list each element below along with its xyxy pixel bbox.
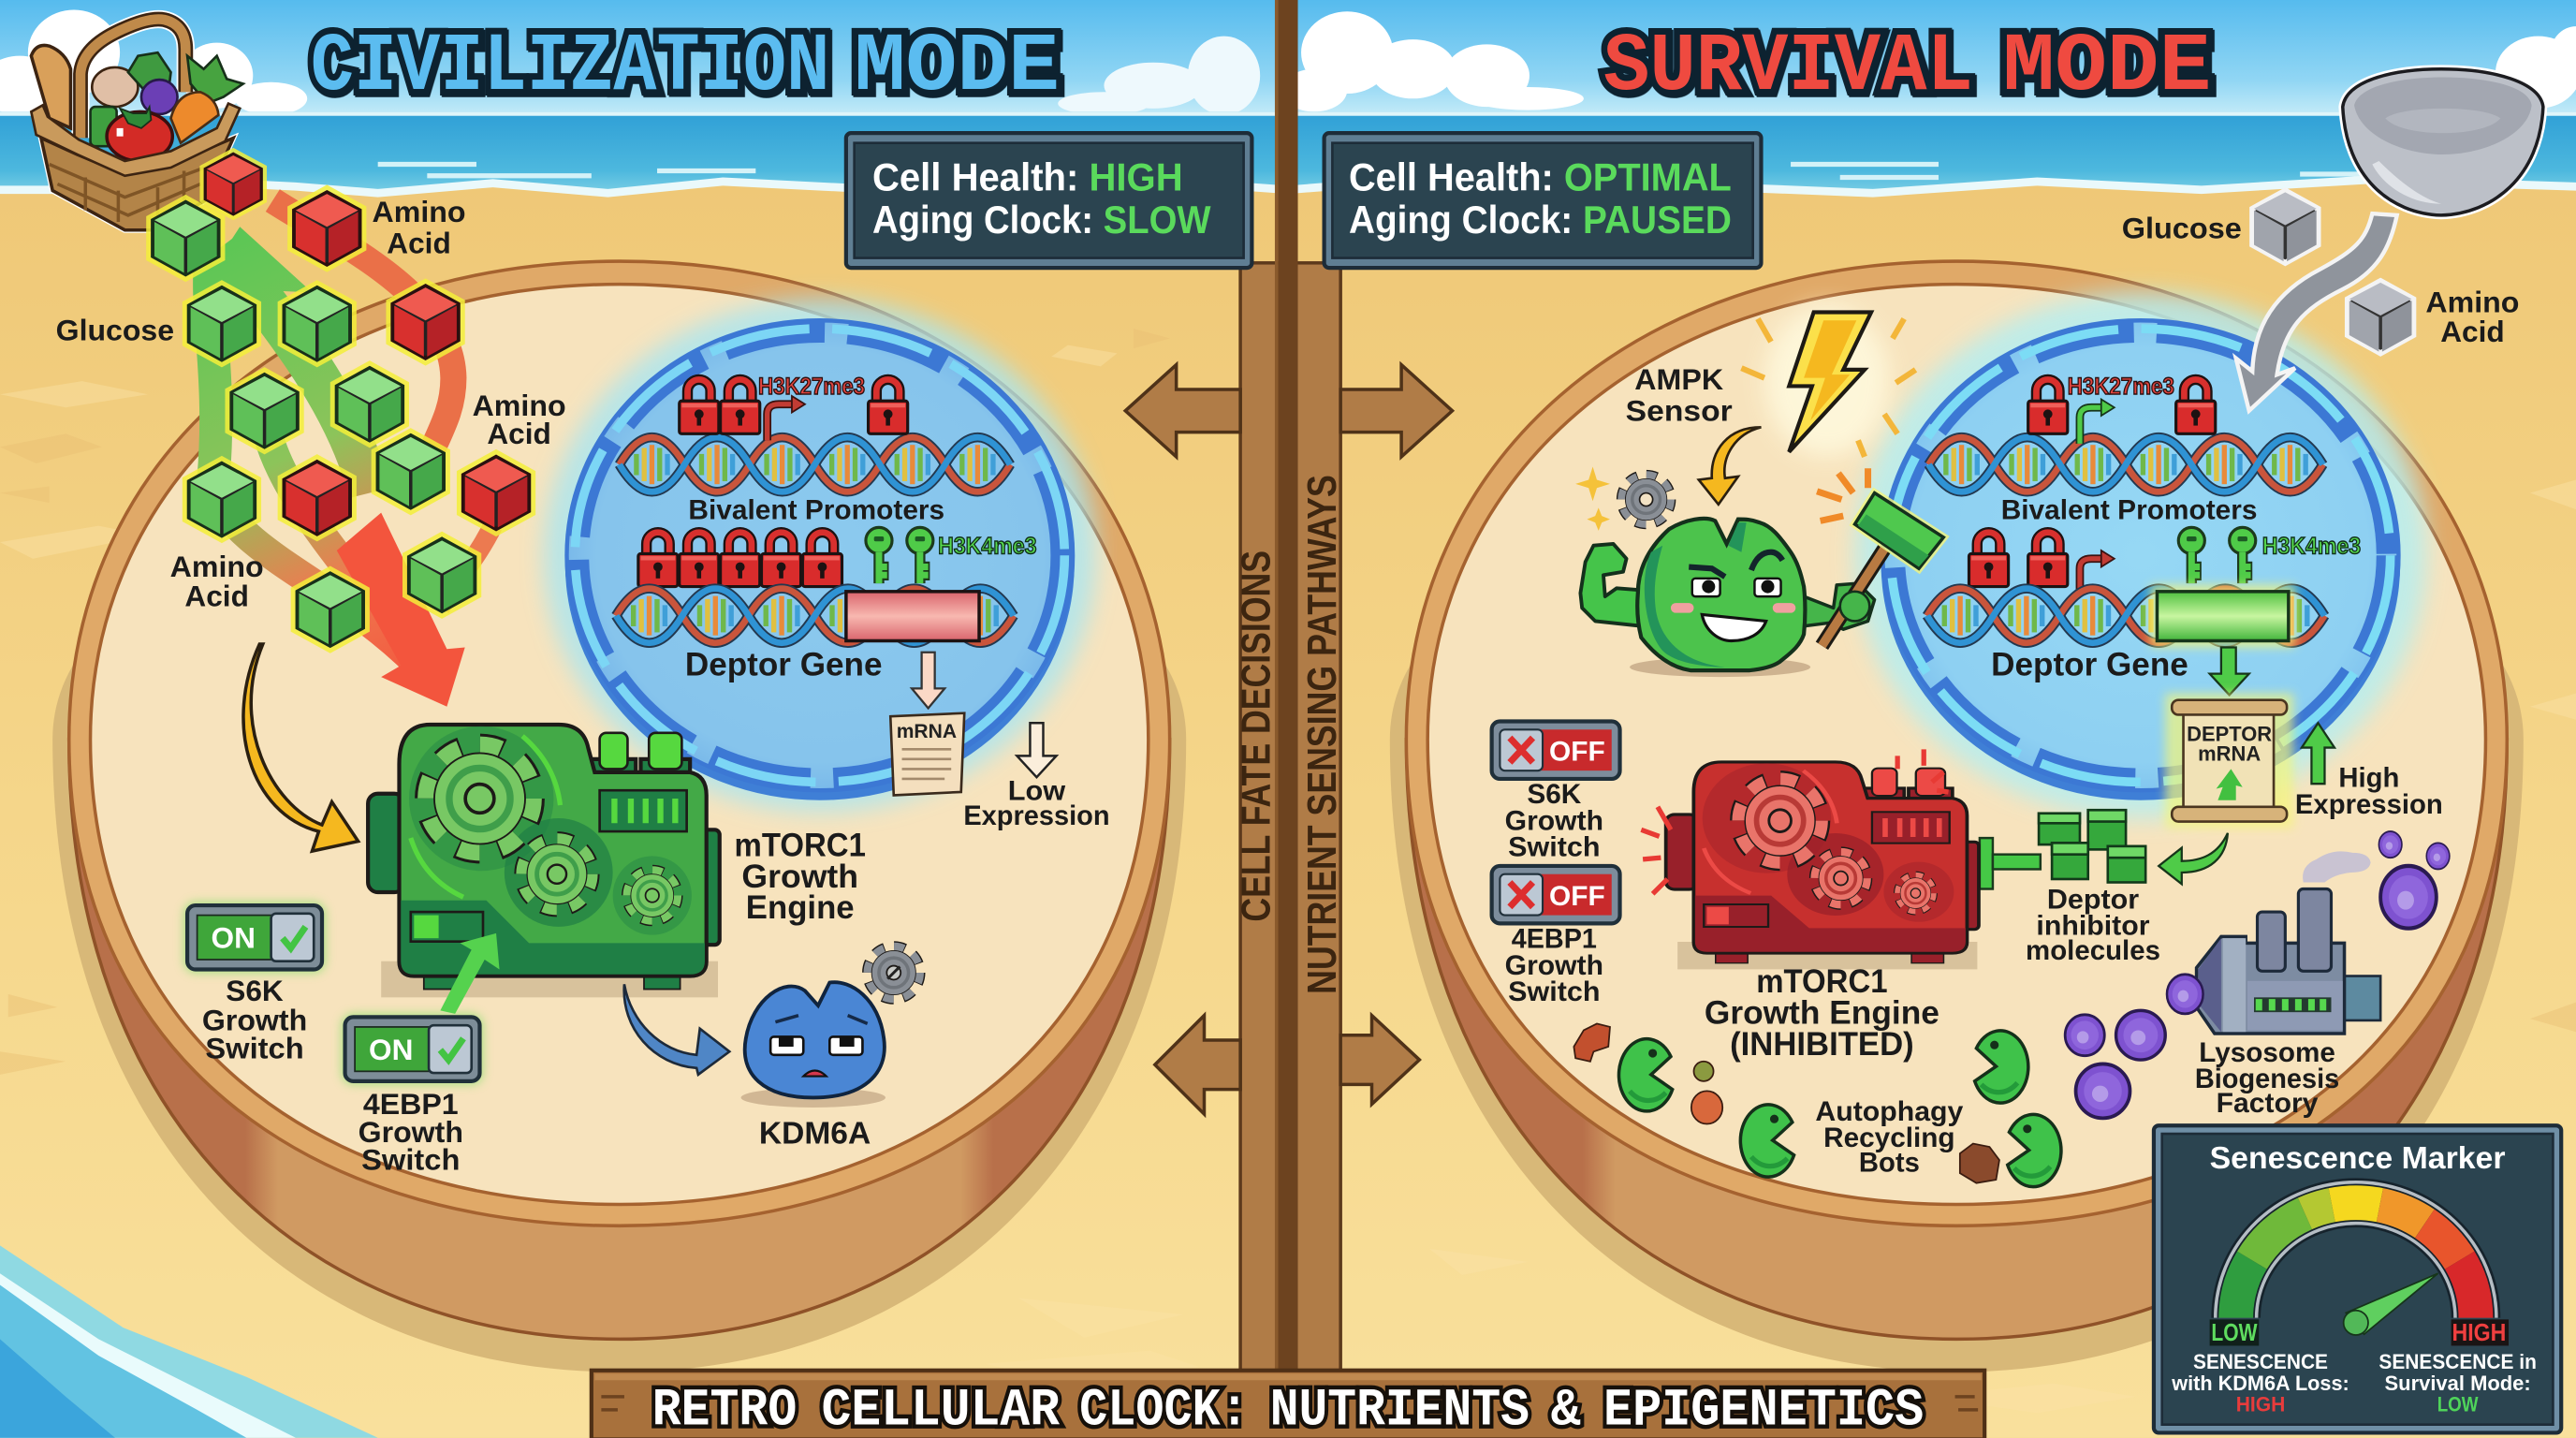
debris particles [1573, 1023, 1999, 1183]
label: 4EBP1 growth switch: 4EBP1 [1512, 924, 1597, 955]
label: autophagy bots [1815, 1096, 1964, 1178]
label: mTORC1 growth engine: Engine [746, 889, 855, 926]
arrow: transcription [2210, 648, 2249, 695]
label: S6K growth switch: Switch [1508, 831, 1600, 862]
label: amino acid depleted [2425, 285, 2519, 348]
label: S6K growth switch: Growth [1505, 805, 1603, 836]
status box: civilization [846, 133, 1251, 268]
label: S6K growth switch [202, 974, 307, 1064]
label: amino acid left: Acid [184, 580, 249, 613]
arrow: upper right branch [1340, 365, 1453, 457]
label: deptor inhibitor molecules: molecules [2026, 935, 2160, 966]
banner: retro cellular clock [592, 1371, 1984, 1438]
status box: civilization: Cell Health: HIGH [872, 155, 1183, 199]
label: 4EBP1 growth switch [359, 1087, 463, 1177]
panel: survival mode cell [1390, 261, 2524, 1372]
switch: 4EBP1 off: OFF [1549, 881, 1605, 912]
tag: H3K4me3: H3K4me3 [2262, 534, 2361, 559]
label: mTORC1 inhibited: mTORC1 [1756, 963, 1888, 1000]
text: senescence with KDM6A loss: SENESCENCE [2193, 1350, 2328, 1373]
label: glucose: Glucose [56, 313, 174, 346]
text: senescence in survival mode: LOW [2437, 1393, 2479, 1416]
character: tired KDM6A [741, 982, 886, 1108]
label: bivalent promoters: Bivalent Promoters [688, 495, 944, 526]
title: civilization mode: MODE [855, 22, 1060, 114]
text: senescence with KDM6A loss: with KDM6A Loss: [2171, 1372, 2349, 1395]
label: lysosome factory [2195, 1037, 2339, 1119]
label: amino acid left: Amino [170, 550, 264, 583]
label: deptor inhibitor molecules: inhibitor [2036, 911, 2150, 942]
label: deptor gene: Deptor Gene [685, 646, 882, 682]
panel: civilization mode cell [52, 261, 1186, 1372]
label: mTORC1 growth engine: mTORC1 [735, 827, 866, 863]
lysosome biogenesis factory [2197, 851, 2380, 1034]
label: mTORC1 inhibited [1705, 963, 1939, 1063]
deptor mRNA scroll: mRNA [2198, 742, 2261, 766]
status box: survival [1325, 133, 1761, 268]
nucleus [1855, 292, 2426, 818]
label: mTORC1 growth engine: Growth [741, 858, 858, 895]
label: 4EBP1 growth switch: Switch [361, 1143, 460, 1177]
arrow: lower left branch [1155, 1016, 1240, 1114]
DNA: bivalent promoters [620, 437, 1010, 492]
arrow: upper left branch [1125, 365, 1240, 457]
mRNA scroll: mRNA [897, 721, 957, 742]
label: 4EBP1 growth switch: Switch [1508, 976, 1600, 1007]
label: high expression [2295, 763, 2443, 820]
arrow: switch to engine [440, 933, 500, 1014]
switch: S6K on: ON [212, 921, 256, 955]
deptor gene block [846, 592, 979, 640]
label: amino acid top: Acid [387, 226, 451, 259]
machine: mTORC1 growth engine [368, 725, 720, 997]
label: amino acid depleted: Acid [2440, 315, 2505, 348]
arrow: low expression [1017, 723, 1057, 777]
sea [0, 111, 2576, 211]
arrow: AMPK to KDM6A [1699, 427, 1761, 505]
character: energized KDM6A [1580, 519, 1875, 677]
flow arrows [210, 246, 419, 666]
arrow: scarce nutrient flow [2236, 213, 2397, 411]
label: S6K growth switch: S6K [1527, 779, 1582, 810]
label: AMPK sensor: AMPK [1634, 362, 1723, 396]
label: AMPK sensor [1626, 362, 1733, 427]
arrow: engine to KDM6A [624, 984, 729, 1075]
promoter arrow [768, 396, 805, 440]
label: cell fate decisions: CELL FATE DECISIONS [1234, 550, 1280, 922]
label: deptor inhibitor molecules: Deptor [2047, 885, 2140, 916]
label: lysosome factory: Factory [2217, 1088, 2319, 1119]
autophagy recycling bots [1618, 1031, 2061, 1187]
cube: glucose depleted [2252, 191, 2318, 263]
deptor inhibitor molecules [2039, 810, 2145, 882]
DNA: deptor gene active [1927, 589, 2324, 643]
title: survival mode: SURVIVAL [1603, 22, 1973, 114]
lightning sparks [1741, 318, 1915, 457]
mRNA scroll [890, 713, 964, 795]
label: 4EBP1 growth switch: Growth [1505, 950, 1603, 981]
high indicator: HIGH [2452, 1318, 2506, 1346]
cell body [52, 261, 1186, 1372]
label: mTORC1 inhibited: (INHIBITED) [1730, 1026, 1914, 1063]
label: KDM6A: KDM6A [759, 1117, 871, 1152]
switch: 4EBP1 on: ON [369, 1033, 413, 1066]
gear: active [1622, 476, 1670, 523]
switch: 4EBP1 off [1492, 866, 1620, 923]
machine: mTORC1 inhibited [1666, 762, 1979, 969]
promoter arrow: active [2080, 399, 2115, 444]
label: nutrient sensing pathways: NUTRIENT SENSING PATHWAYS [1299, 475, 1345, 994]
label: amino acid right: Amino [473, 389, 566, 422]
sparkles [1575, 466, 1610, 531]
label: mTORC1 inhibited: Growth Engine [1705, 994, 1939, 1031]
status box: civilization: Aging Clock: SLOW [872, 198, 1211, 242]
central divider post [1125, 0, 1453, 1372]
title: survival mode [1603, 22, 2211, 114]
lysosome vesicles [2065, 831, 2450, 1118]
label: autophagy bots: Bots [1859, 1147, 1920, 1178]
arrow: yellow signal to engine [243, 644, 359, 851]
text: senescence with KDM6A loss: HIGH [2236, 1393, 2285, 1416]
label: low expression: Expression [963, 800, 1110, 831]
warning sparks [1641, 749, 1949, 894]
switch: 4EBP1 on [342, 1014, 483, 1084]
text: senescence in survival mode: SENESCENCE in [2378, 1350, 2537, 1373]
impact sparks [1817, 468, 1868, 521]
inhibition bar [1980, 838, 2041, 889]
nutrient stream: civilization mode [56, 154, 566, 707]
icon: empty bowl [2343, 69, 2543, 215]
tag: H3K4me3: H3K4me3 [938, 534, 1036, 559]
text: senescence in survival mode: Survival Mode: [2385, 1372, 2531, 1395]
arrow: high expression [2302, 723, 2334, 784]
label: bivalent promoters: Bivalent Promoters [2001, 495, 2258, 526]
label: autophagy bots: Autophagy [1815, 1096, 1964, 1127]
icon: food basket [31, 19, 243, 230]
label: amino acid right: Acid [487, 417, 551, 450]
arrow: weak transcription [912, 653, 944, 708]
epigenetic locks: upper [2028, 379, 2216, 433]
promoter arrow: gene [2080, 550, 2115, 592]
nutrient cubes [153, 154, 529, 646]
status box: survival: Aging Clock: PAUSED [1349, 198, 1732, 242]
label: mTORC1 growth engine [735, 827, 866, 926]
label: amino acid top [373, 195, 466, 259]
title: civilization mode: CIVILIZATION [311, 22, 829, 114]
switch: S6K on [184, 902, 326, 973]
cube: amino acid depleted [2348, 281, 2413, 353]
clouds [0, 10, 2576, 115]
label: AMPK sensor: Sensor [1626, 393, 1733, 427]
gear: KDM6A idle [868, 947, 919, 998]
label: lysosome factory: Lysosome [2199, 1037, 2335, 1068]
label: high expression: High [2338, 763, 2399, 794]
cell body [1390, 261, 2524, 1372]
DNA: bivalent promoters [1928, 437, 2323, 492]
label: S6K growth switch [1505, 779, 1603, 862]
DNA: deptor gene silenced [616, 589, 1014, 643]
arrow: mRNA to molecules [2159, 833, 2228, 884]
label: 4EBP1 growth switch: 4EBP1 [363, 1087, 459, 1121]
label: S6K growth switch: S6K [226, 974, 284, 1007]
label: amino acid left [170, 550, 264, 613]
deptor mRNA scroll: DEPTOR [2187, 723, 2272, 746]
label: lysosome factory: Biogenesis [2195, 1064, 2339, 1094]
bottom-left sea [0, 1245, 378, 1438]
epigenetic locks: upper [680, 379, 908, 433]
label: S6K growth switch: Switch [205, 1031, 304, 1064]
label: amino acid depleted: Amino [2425, 285, 2519, 318]
text: senescence with KDM6A loss [2171, 1350, 2349, 1416]
label: deptor gene: Deptor Gene [1991, 646, 2188, 682]
gauge needle [2344, 1273, 2438, 1335]
label: low expression: Low [1008, 776, 1066, 807]
arrow: lower right branch [1340, 1016, 1419, 1104]
epigenetic locks: lower [1969, 533, 2068, 587]
deptor gene block active [2150, 585, 2295, 648]
label: deptor inhibitor molecules [2026, 885, 2160, 966]
text: senescence in survival mode [2378, 1350, 2537, 1416]
activating keys [2178, 527, 2256, 583]
label: 4EBP1 growth switch: Growth [359, 1115, 463, 1149]
nucleus [544, 299, 1096, 812]
title: survival mode: MODE [2002, 22, 2211, 114]
sky background [0, 0, 2576, 115]
icon: lightning bolt [1764, 305, 1889, 457]
label: high expression: Expression [2295, 789, 2443, 820]
label: low expression [963, 776, 1110, 831]
activating keys [866, 527, 933, 583]
tag: H3K27me3: H3K27me3 [2068, 374, 2174, 400]
deptor mRNA scroll [2165, 694, 2293, 829]
label: S6K growth switch: Growth [202, 1003, 307, 1036]
label: amino acid right [473, 389, 566, 450]
label: autophagy bots: Recycling [1823, 1123, 1955, 1153]
low indicator: LOW [2211, 1318, 2258, 1346]
hammer [1822, 493, 1943, 646]
epigenetic locks: lower [638, 533, 842, 587]
switch: S6K off [1492, 721, 1620, 779]
status box: survival: Cell Health: OPTIMAL [1349, 155, 1732, 199]
gauge arc [2236, 1203, 2476, 1318]
panel: senescence marker [2154, 1125, 2561, 1432]
label: glucose depleted: Glucose [2122, 211, 2242, 244]
tag: H3K27me3: H3K27me3 [758, 374, 865, 400]
gauge title: Senescence Marker [2210, 1141, 2506, 1176]
switch: S6K off: OFF [1549, 737, 1605, 768]
label: amino acid top: Amino [373, 195, 466, 228]
label: 4EBP1 growth switch [1505, 924, 1603, 1007]
